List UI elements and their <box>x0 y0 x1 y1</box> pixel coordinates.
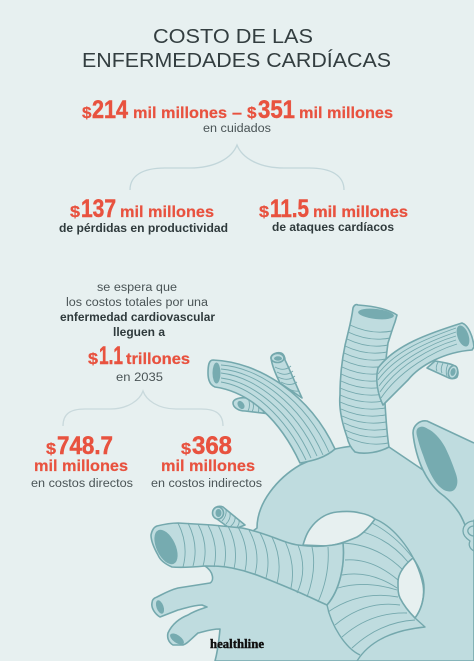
title: COSTO DE LAS <box>153 25 313 48</box>
pulmonary artery fan <box>327 519 425 661</box>
illustration: heart <box>150 305 474 661</box>
vessel: upper right large <box>377 323 474 405</box>
logo: healthline: healthline <box>210 636 264 651</box>
stat: care cost range: 351 <box>258 96 295 124</box>
vessel: central vertical <box>340 305 397 453</box>
stat: 2035 total <box>88 342 190 384</box>
stat: 2035 total: 1.1 <box>99 342 123 370</box>
stat: productivity losses: 137 <box>81 195 116 223</box>
stat: indirect costs: en costos indirectos <box>151 478 262 490</box>
stat: care cost range: mil millones <box>133 105 227 122</box>
stat: care cost range <box>82 96 393 135</box>
stat: productivity losses: mil millones <box>120 204 214 221</box>
stat: direct costs: $ <box>46 441 56 458</box>
stat: indirect costs: mil millones <box>161 458 255 475</box>
stat: care cost range: 214 <box>92 96 128 124</box>
stat: direct costs: en costos directos <box>31 478 133 490</box>
auricle <box>413 421 474 551</box>
title <box>82 25 391 72</box>
vessel: lower left tips <box>154 599 186 647</box>
stat: indirect costs: 368 <box>192 432 232 460</box>
stat: heart attacks: 11.5 <box>270 195 309 223</box>
vessel: small right back <box>427 361 459 379</box>
stat: indirect costs: $ <box>181 441 191 458</box>
stat: direct costs: mil millones <box>34 458 128 475</box>
vessel: small upper left back <box>271 353 302 398</box>
brace: care cost breakdown <box>130 145 344 190</box>
vessel: upper left large <box>208 360 335 463</box>
aorta tube <box>150 523 343 605</box>
stat: 2035 total: $ <box>88 351 98 368</box>
pulmonary artery openings <box>303 511 424 618</box>
text: projection intro: lleguen a <box>113 327 166 339</box>
stat: care cost range: $ <box>247 105 257 122</box>
heart body <box>152 445 474 661</box>
text: projection intro: se espera que <box>97 282 177 294</box>
stat: 2035 total: trillones <box>126 351 190 368</box>
title: ENFERMEDADES CARDÍACAS <box>82 49 391 72</box>
vessel: small top of aorta <box>212 506 245 530</box>
text: projection intro <box>60 282 216 339</box>
stat: heart attacks: de ataques cardíacos <box>272 222 394 234</box>
stat: heart attacks: $ <box>259 204 269 221</box>
vessel: small left back <box>233 398 270 414</box>
text: projection intro: los costos totales por una <box>66 297 209 309</box>
stat: care cost range: $ <box>82 105 92 122</box>
stat: care cost range: – <box>232 105 242 122</box>
stat: productivity losses: de pérdidas en productividad <box>59 223 228 235</box>
stat: heart attacks <box>259 195 408 234</box>
stat: 2035 total: en 2035 <box>116 372 163 384</box>
stat: productivity losses: $ <box>70 204 80 221</box>
stat: direct costs <box>31 432 133 490</box>
stat: direct costs: 748.7 <box>57 432 113 460</box>
brace: 2035 breakdown <box>63 391 223 426</box>
stat: heart attacks: mil millones <box>313 204 408 221</box>
stat: care cost range: mil millones <box>299 105 393 122</box>
stat: care cost range: en cuidados <box>203 123 271 135</box>
stat: productivity losses <box>59 195 228 235</box>
text: projection intro: enfermedad cardiovascular <box>60 312 216 324</box>
stat: indirect costs <box>151 432 262 490</box>
